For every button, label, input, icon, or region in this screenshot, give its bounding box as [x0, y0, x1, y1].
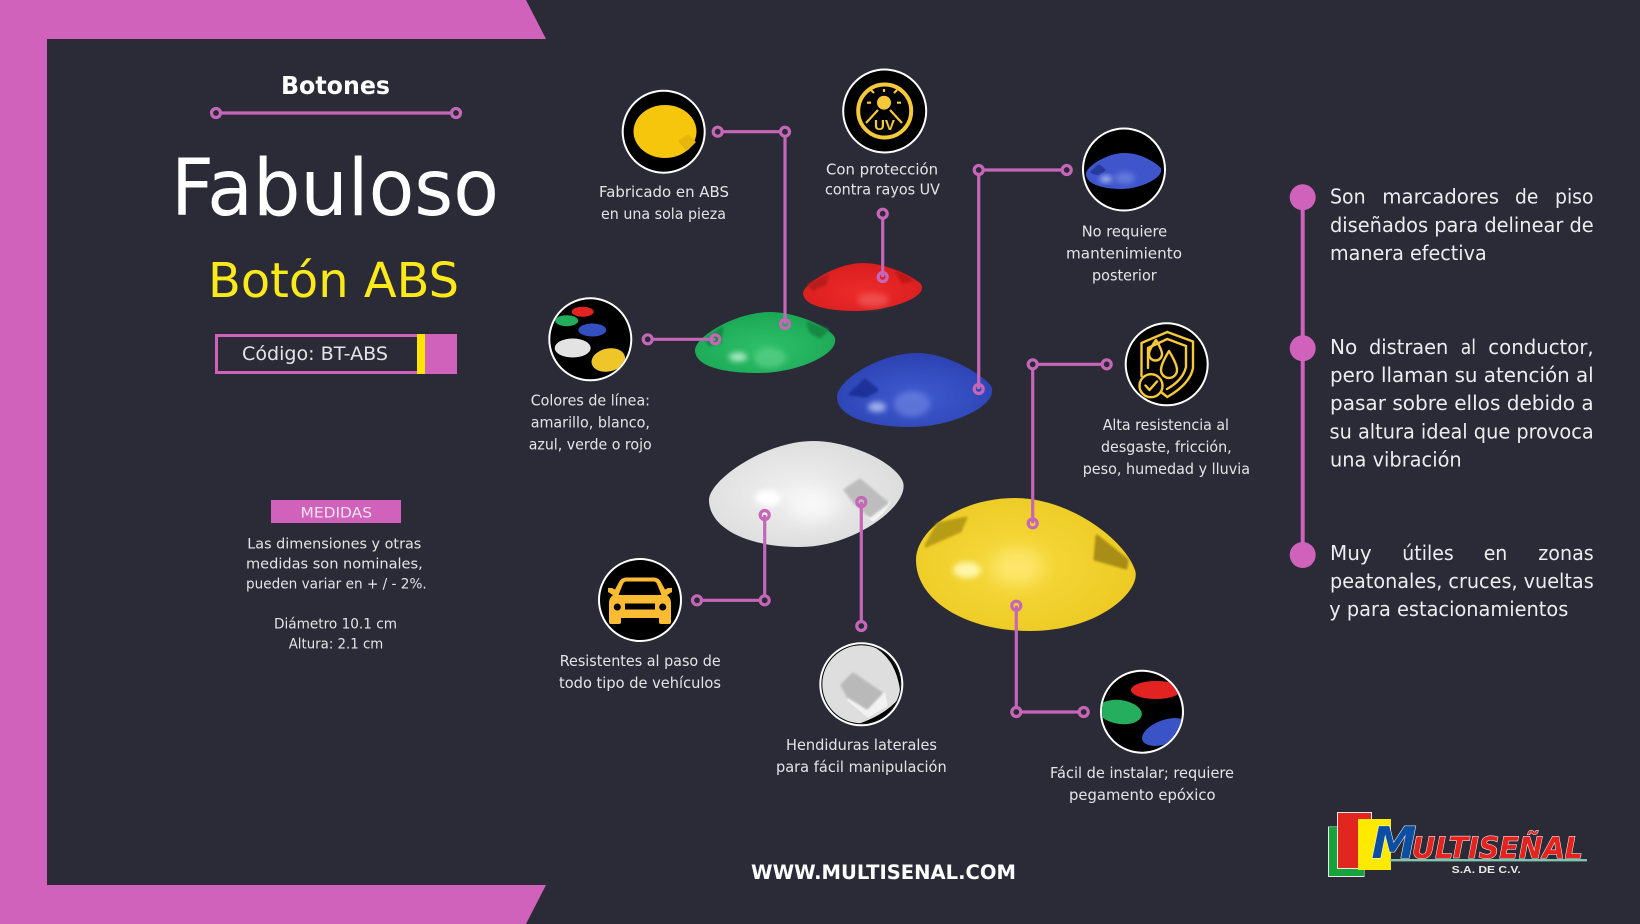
icon: colored buttons: [549, 298, 631, 380]
text: marcadores: de: [1515, 185, 1538, 209]
caption: [776, 736, 947, 776]
panel: product title: [171, 71, 499, 374]
connector: colores: [643, 335, 720, 344]
feature: resistencia: [1083, 323, 1250, 478]
caption: [1066, 223, 1182, 285]
medidas text: Las dimensiones y otras: [247, 536, 421, 552]
caption: Alta resistencia al: [1103, 416, 1229, 434]
blue button: [837, 353, 992, 427]
text: zonas: en: [1484, 541, 1507, 565]
medidas text: Diámetro 10.1 cm: [274, 616, 397, 632]
feature: fabricado en ABS: [599, 91, 729, 223]
caption: [529, 391, 652, 453]
caption: posterior: [1092, 267, 1157, 285]
feature: UV: [825, 70, 941, 198]
red button: [803, 263, 922, 311]
caption: en una sola pieza: [601, 205, 726, 223]
text: marcadores: marcadores: [1382, 185, 1499, 209]
medidas label: [271, 500, 401, 523]
icon: car: [599, 559, 681, 641]
icon: UV sun: UV: [874, 117, 895, 134]
text: conductor: No: [1330, 335, 1357, 359]
text: zonas: y para estacionamientos: [1329, 597, 1568, 621]
caption: todo tipo de vehículos: [559, 674, 721, 692]
caption: Con protección: [826, 160, 938, 178]
medidas text: [246, 536, 427, 652]
medidas text: medidas son nominales,: [246, 556, 423, 572]
icon: blue button: [1083, 128, 1165, 210]
logo: Multiseñal: [1328, 812, 1587, 876]
feature: colores: [529, 298, 652, 453]
panel: description timeline: [1290, 184, 1594, 621]
caption: [1083, 416, 1250, 478]
timeline line and dots: [1290, 184, 1316, 568]
icon: shield with drops: [1126, 323, 1208, 405]
text: marcadores: diseñados para delinear de: [1330, 213, 1594, 237]
text: zonas: [1329, 541, 1594, 621]
connector: hendiduras: [857, 498, 866, 630]
caption: [825, 160, 941, 198]
text: zonas: Muy: [1330, 541, 1372, 565]
subtitle: Botón ABS: Botón ABS: [208, 253, 459, 309]
title: Fabuloso: Fabuloso: [171, 144, 499, 234]
icon: side notch close-up: [820, 643, 906, 732]
text: marcadores: manera efectiva: [1330, 241, 1487, 265]
caption: Fabricado en ABS: [599, 183, 729, 201]
panel: medidas: [246, 500, 427, 652]
caption: Hendiduras laterales: [786, 736, 937, 754]
text: marcadores: [1330, 185, 1594, 265]
connector: UV: [878, 209, 887, 282]
logo: Multiseñal: M: [1372, 818, 1416, 869]
text: zonas: útiles: [1402, 541, 1454, 565]
connector: fabricado: [713, 127, 790, 328]
caption: azul, verde o rojo: [529, 435, 652, 453]
feature: mantenimiento: [1066, 128, 1182, 285]
pink frame: [0, 0, 546, 924]
caption: mantenimiento: [1066, 245, 1182, 263]
text: conductor: pasar sobre ellos debido a: [1330, 391, 1594, 415]
caption: amarillo, blanco,: [531, 413, 650, 431]
text: marcadores: piso: [1555, 185, 1594, 209]
feature: vehiculos: [559, 559, 721, 692]
connector: mantenimiento: [974, 166, 1071, 394]
caption: Fácil de instalar; requiere: [1050, 764, 1234, 782]
caption: peso, humedad y lluvia: [1083, 460, 1250, 478]
heading: Botones: Botones: [281, 71, 390, 100]
footer website: WWW.MULTISENAL.COM: [751, 861, 1016, 884]
feature: hendiduras: [776, 643, 947, 776]
logo: Multiseñal: ULTISEÑAL: [1412, 829, 1583, 865]
text: zonas: zonas: [1538, 541, 1594, 565]
text: conductor: al: [1461, 335, 1476, 359]
connector: vehiculos: [692, 510, 769, 605]
yellow button: [916, 498, 1136, 631]
caption: [559, 652, 721, 692]
caption: desgaste, fricción,: [1101, 438, 1232, 456]
caption: [1050, 764, 1234, 804]
caption: No requiere: [1082, 223, 1167, 241]
connector: instalar: [1012, 601, 1088, 716]
caption: [599, 183, 729, 223]
caption: para fácil manipulación: [776, 758, 947, 776]
connector: resistencia: [1028, 360, 1111, 528]
caption: pegamento epóxico: [1069, 786, 1216, 804]
text: conductor: pero llaman su atención al: [1330, 363, 1594, 387]
text: conductor: su altura ideal que provoca: [1330, 419, 1594, 443]
medidas text: Altura: 2.1 cm: [289, 636, 383, 652]
caption: Colores de línea:: [531, 391, 650, 409]
white button: [709, 441, 904, 547]
text: conductor: [1330, 335, 1594, 471]
code badge: Código: BT-ABS: [242, 343, 388, 365]
medidas text: pueden variar en + / - 2%.: [246, 576, 427, 592]
text: conductor: conductor,: [1488, 335, 1594, 359]
icon: yellow button: [623, 91, 705, 173]
text: zonas: peatonales, cruces, vueltas: [1330, 569, 1594, 593]
text: conductor: una vibración: [1330, 447, 1462, 471]
text: conductor: distraen: [1369, 335, 1448, 359]
code badge: [216, 334, 457, 374]
icon: three buttons: [1097, 671, 1192, 753]
green button: [695, 312, 835, 373]
text: marcadores: Son: [1330, 185, 1366, 209]
logo: Multiseñal: S.A. DE C.V.: [1452, 864, 1521, 876]
caption: contra rayos UV: [825, 180, 941, 198]
caption: Resistentes al paso de: [560, 652, 721, 670]
medidas label: MEDIDAS: [300, 506, 372, 522]
feature: instalar: [1050, 671, 1234, 804]
heading divider: [212, 108, 460, 118]
